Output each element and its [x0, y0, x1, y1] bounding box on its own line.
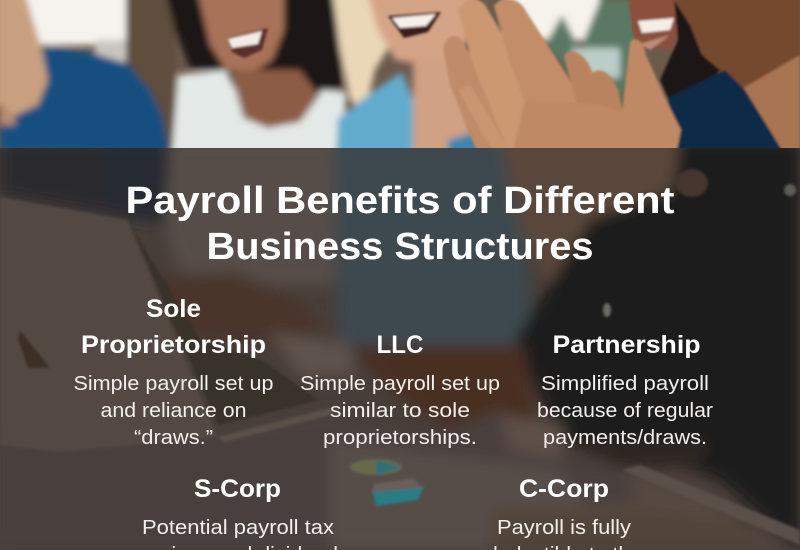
- photo: darkened desk scene behind text: [0, 140, 800, 550]
- title: Payroll Benefits of Different: [126, 180, 675, 222]
- panel: sole proprietorship: [74, 295, 274, 449]
- text: sole proprietorship benefit: “draws.”: [134, 427, 213, 449]
- panel: S-Corp: [138, 475, 338, 550]
- text: LLC benefit: Simple payroll set up: [300, 373, 500, 395]
- text: partnership benefit: [537, 373, 713, 449]
- title: Business Structures: [206, 226, 594, 268]
- heading: sole proprietorship: [81, 295, 266, 359]
- panel: LLC: [300, 331, 500, 449]
- text: partnership benefit: Simplified payroll: [541, 373, 709, 395]
- heading: S-Corp: S-Corp: [194, 475, 281, 503]
- panel: partnership: [537, 331, 713, 449]
- text: partnership benefit: payments/draws.: [543, 427, 707, 449]
- heading: partnership: Partnership: [552, 331, 700, 359]
- text: sole proprietorship benefit: Simple payroll set up: [74, 373, 274, 395]
- title: [126, 180, 675, 268]
- text: C-Corp benefit, cropped at bottom: [486, 517, 642, 550]
- heading: sole proprietorship: Proprietorship: [81, 331, 266, 359]
- text: partnership benefit: because of regular: [537, 400, 713, 422]
- text: sole proprietorship benefit: [74, 373, 274, 449]
- panel: C-Corp: [486, 475, 642, 550]
- text: S-Corp benefit, cropped at bottom: Potential payroll tax: [142, 517, 334, 539]
- text: LLC benefit: [300, 373, 500, 449]
- text: LLC benefit: proprietorships.: [323, 427, 477, 449]
- text: sole proprietorship benefit: and reliance on: [100, 400, 246, 422]
- photo: smiling team at top: [0, 0, 800, 160]
- text: C-Corp benefit, cropped at bottom: Payroll is fully: [497, 517, 631, 539]
- heading: LLC: LLC: [376, 331, 424, 359]
- text: S-Corp benefit, cropped at bottom: [138, 517, 338, 550]
- heading: C-Corp: C-Corp: [519, 475, 609, 503]
- heading: sole proprietorship: Sole: [146, 295, 201, 323]
- text: LLC benefit: similar to sole: [330, 400, 470, 422]
